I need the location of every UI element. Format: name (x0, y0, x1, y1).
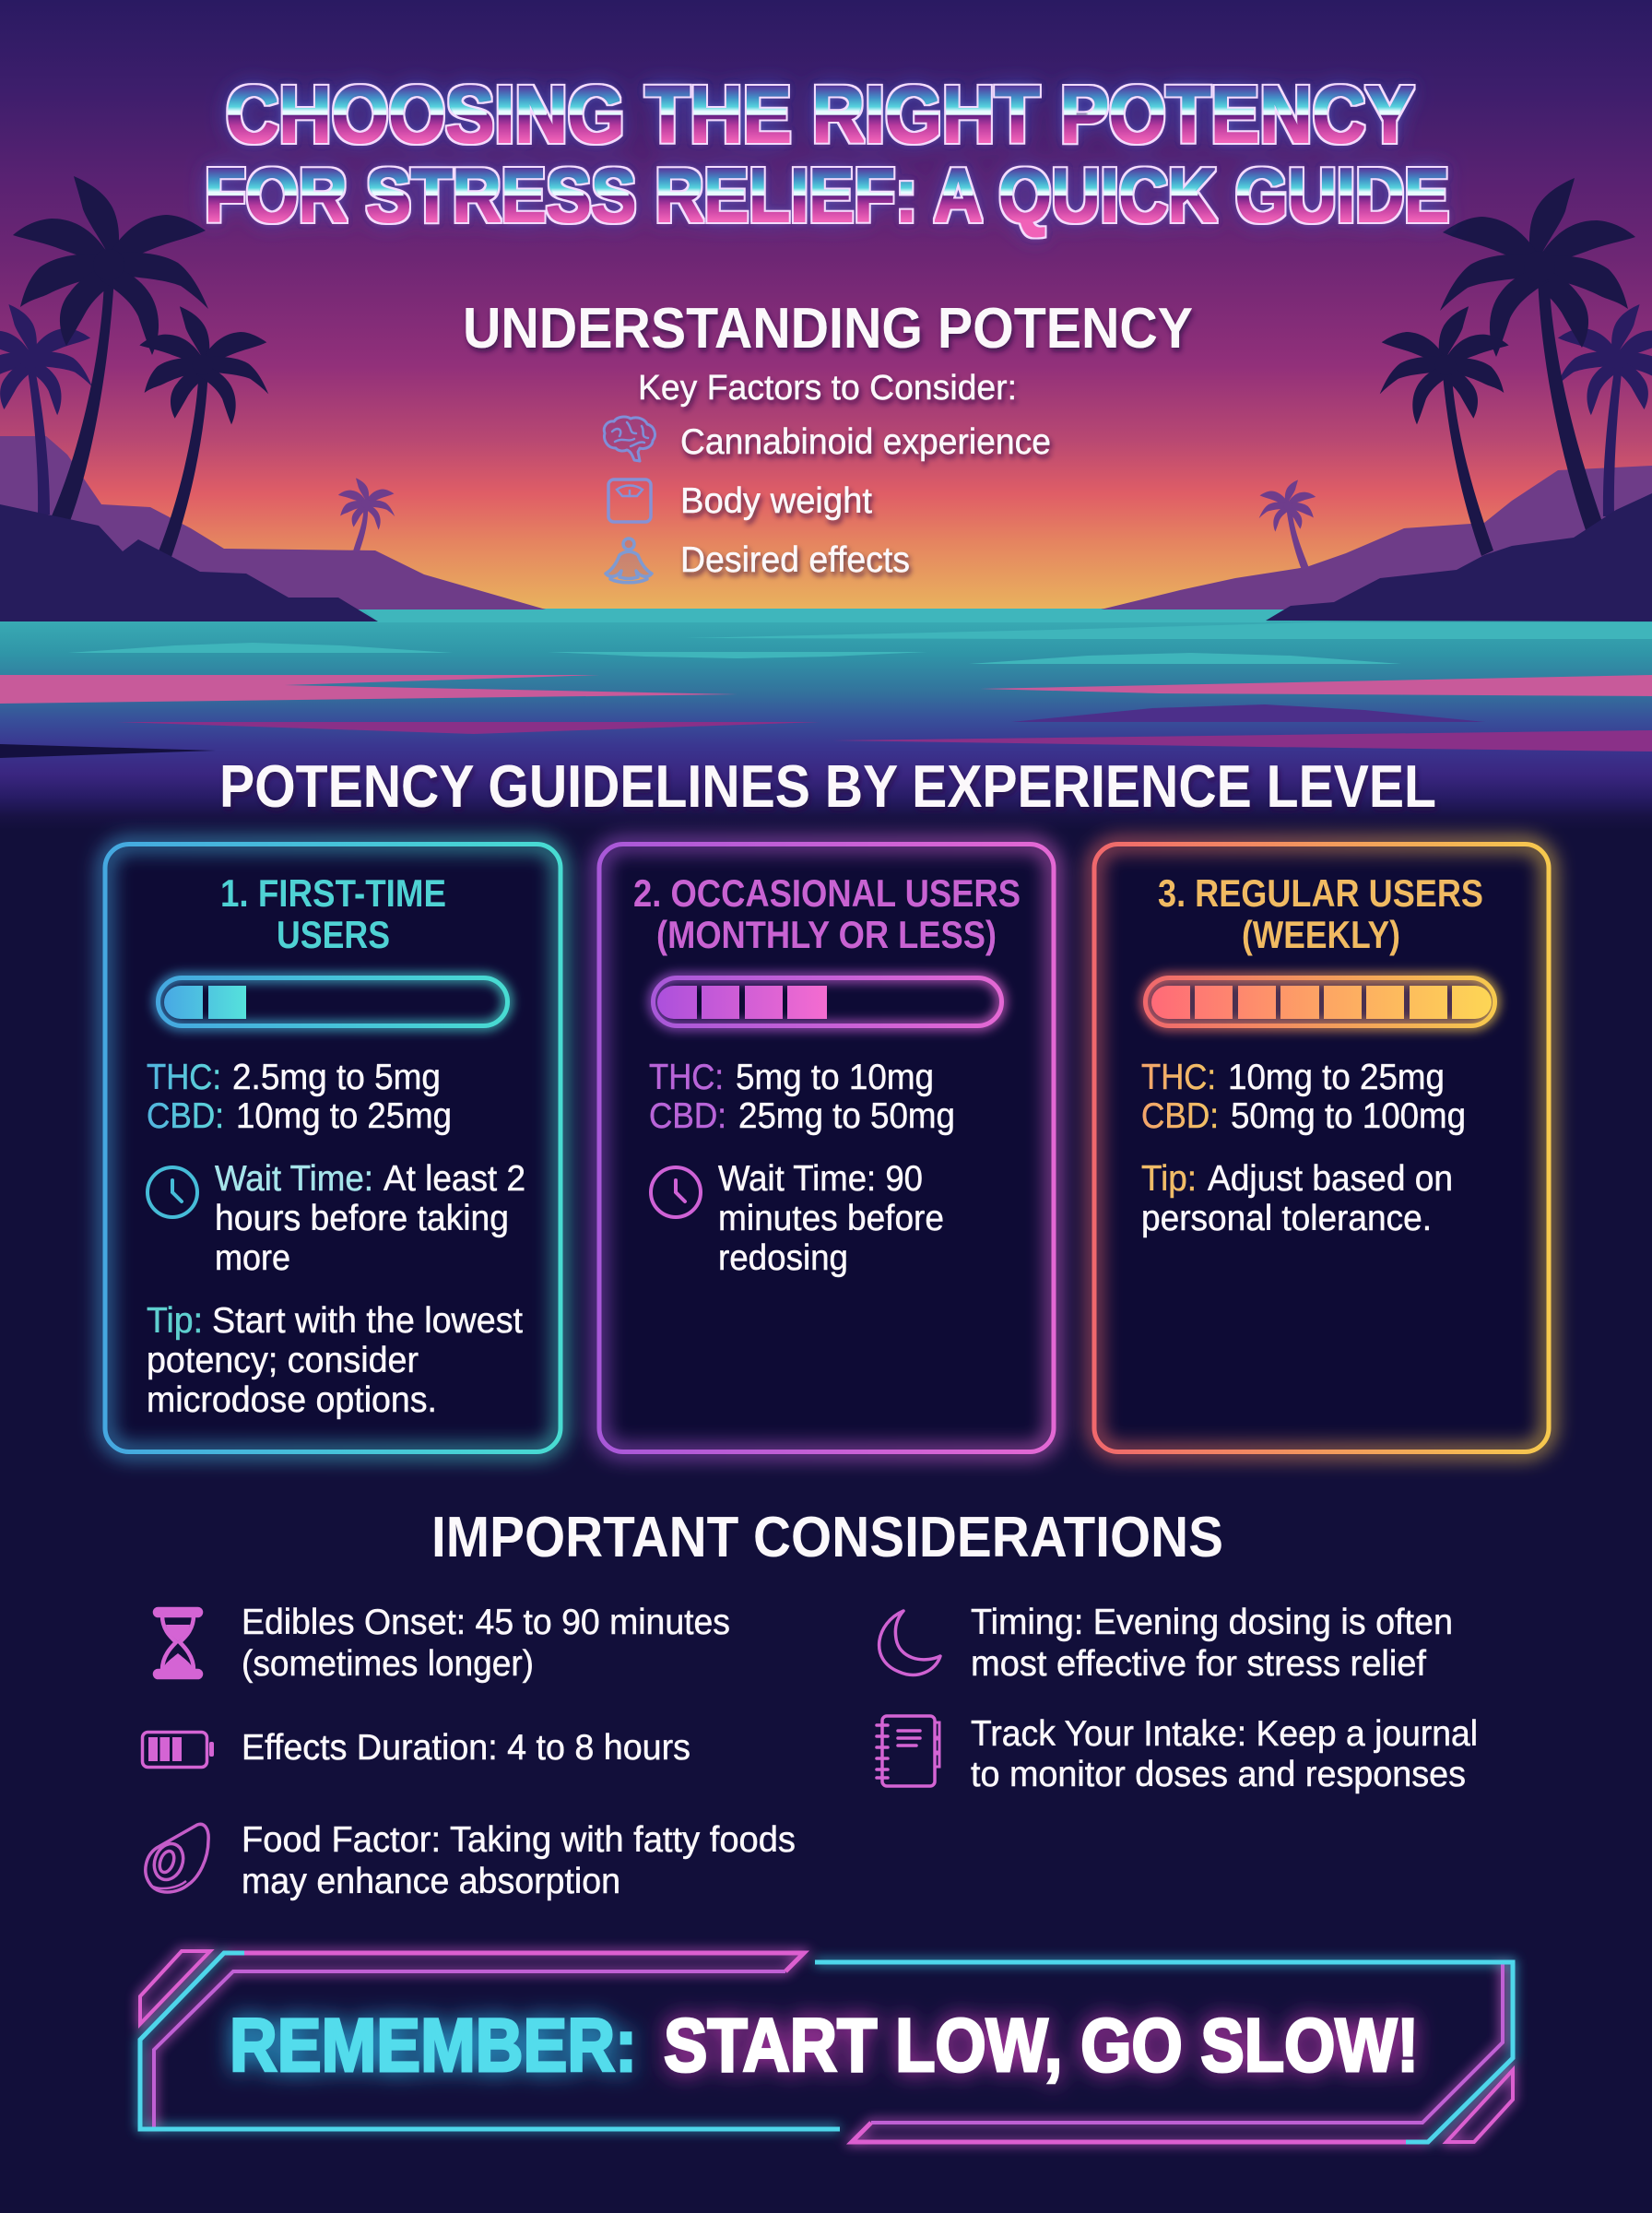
card 1 tip: Tip: (147, 1301, 203, 1341)
factor: cannabinoid experience: Cannabinoid experience (680, 422, 1051, 462)
icon: notebook (877, 1716, 939, 1786)
text: track your intake: to monitor doses and responses (971, 1755, 1466, 1794)
card 2 potency bar (653, 977, 1001, 1025)
heading: important considerations: IMPORTANT CONSIDERATIONS (431, 1506, 1223, 1569)
card 3 title: 3. REGULAR USERS (1158, 871, 1483, 915)
card 1 wait time: more (215, 1238, 290, 1278)
card 3 title (1158, 871, 1483, 956)
card 1 dosage: CBD: (147, 1096, 224, 1136)
text: edibles onset: (sometimes longer) (242, 1644, 534, 1684)
heading: potency guidelines: POTENCY GUIDELINES BY EXPERIENCE LEVEL (219, 752, 1436, 820)
considerations list (142, 1603, 1478, 1901)
text: timing: Timing: Evening dosing is often (971, 1603, 1453, 1642)
heading: understanding potency: UNDERSTANDING POTENCY (463, 297, 1193, 361)
card 1 potency bar (159, 977, 507, 1025)
banner text (230, 2004, 1419, 2088)
icon: scale (608, 479, 651, 522)
card 1 wait time: Wait Time: (215, 1159, 373, 1199)
palm: medium right (1380, 306, 1509, 556)
card 2 dosage: CBD: (649, 1096, 726, 1136)
icon: clock (651, 1167, 701, 1217)
card 2 title: (MONTHLY OR LESS) (656, 913, 997, 956)
factor: body weight: Body weight (680, 481, 872, 521)
card 3 tip (1141, 1159, 1453, 1238)
icon: avocado (146, 1824, 208, 1892)
section: understanding potency (463, 297, 1193, 583)
card 3 dosage (1141, 1058, 1466, 1136)
palm: far left (0, 304, 92, 515)
card 2 wait time: Wait Time: 90 (718, 1159, 923, 1199)
card 1 tip: potency; consider (147, 1341, 419, 1380)
palm: large right (1440, 178, 1635, 530)
scene: sunset beach with palms (0, 0, 1652, 830)
text: track your intake: Track Your Intake: Keep a journal (971, 1714, 1478, 1754)
banner frame (140, 1951, 1513, 2142)
card 2 dosage: THC: (649, 1058, 724, 1097)
card 1 dosage: THC: (147, 1058, 221, 1097)
banner text: START LOW, GO SLOW! (664, 2004, 1419, 2088)
text: food factor: Food Factor: Taking with fatty foods (242, 1820, 796, 1860)
card 2 dosage (649, 1058, 955, 1136)
card 1 wait time (215, 1159, 525, 1278)
card 3 potency bar (1145, 977, 1495, 1025)
icon: clock (148, 1167, 197, 1217)
card 1 wait time: At least 2 (384, 1159, 525, 1199)
icon: meditating figure (606, 538, 652, 583)
icon: hourglass (155, 1609, 201, 1677)
card 2 wait time: minutes before (718, 1199, 944, 1238)
callout: remember banner (140, 1951, 1513, 2142)
card 2 wait time (718, 1159, 944, 1278)
card 1 tip (147, 1301, 523, 1420)
card 3: regular users (1094, 845, 1549, 1451)
icon: battery (142, 1732, 214, 1767)
card 1 title: 1. FIRST-TIME (220, 871, 446, 915)
card 3 tip: Adjust based on (1208, 1159, 1453, 1199)
card 2 wait time: redosing (718, 1238, 848, 1278)
card 3 tip: Tip: (1141, 1159, 1197, 1199)
card 2 title (633, 871, 1021, 956)
card 2 title: 2. OCCASIONAL USERS (633, 871, 1021, 915)
card 3 dosage: 50mg to 100mg (1231, 1096, 1466, 1136)
factor: desired effects: Desired effects (680, 540, 910, 580)
text: edibles onset: Edibles Onset: 45 to 90 minutes (242, 1603, 730, 1642)
card 3 title: (WEEKLY) (1242, 913, 1400, 956)
card 3 dosage: THC: (1141, 1058, 1216, 1097)
text: food factor (242, 1820, 796, 1901)
card 1 dosage (147, 1058, 452, 1136)
card 3 dosage: 10mg to 25mg (1228, 1058, 1445, 1097)
text: effects duration: Effects Duration: 4 to 8 hours (242, 1728, 690, 1768)
text: edibles onset (242, 1603, 730, 1684)
card 2 dosage: 5mg to 10mg (736, 1058, 934, 1097)
card 2 dosage: 25mg to 50mg (738, 1096, 955, 1136)
text: timing: most effective for stress relief (971, 1644, 1426, 1684)
title: FOR STRESS RELIEF: A QUICK GUIDE (205, 152, 1449, 238)
card 1 wait time: hours before taking (215, 1199, 509, 1238)
card 2: occasional users (599, 845, 1054, 1451)
icon: moon (879, 1611, 940, 1675)
card 1 title: USERS (277, 913, 390, 956)
card 1 title (220, 871, 446, 956)
text: food factor: may enhance absorption (242, 1862, 620, 1901)
palm: tiny left (338, 478, 395, 551)
card 1 tip: microdose options. (147, 1380, 437, 1420)
card 1: first-time users (105, 845, 560, 1451)
palm: tiny right (1259, 479, 1316, 570)
text: track your intake (971, 1714, 1478, 1794)
card 1 dosage: 10mg to 25mg (236, 1096, 452, 1136)
banner text: REMEMBER: (230, 2004, 637, 2088)
card 3 dosage: CBD: (1141, 1096, 1219, 1136)
palm: far right (1556, 304, 1652, 516)
card 1 tip: Start with the lowest (212, 1301, 523, 1341)
card 1 dosage: 2.5mg to 5mg (232, 1058, 441, 1097)
palm: medium left (139, 306, 268, 557)
title (205, 70, 1449, 238)
card 3 tip: personal tolerance. (1141, 1199, 1432, 1238)
palm: large left (13, 176, 208, 521)
text: timing (971, 1603, 1453, 1684)
subheading: key factors: Key Factors to Consider: (638, 369, 1017, 408)
title: CHOOSING THE RIGHT POTENCY (226, 70, 1414, 160)
icon: brain (604, 417, 655, 461)
